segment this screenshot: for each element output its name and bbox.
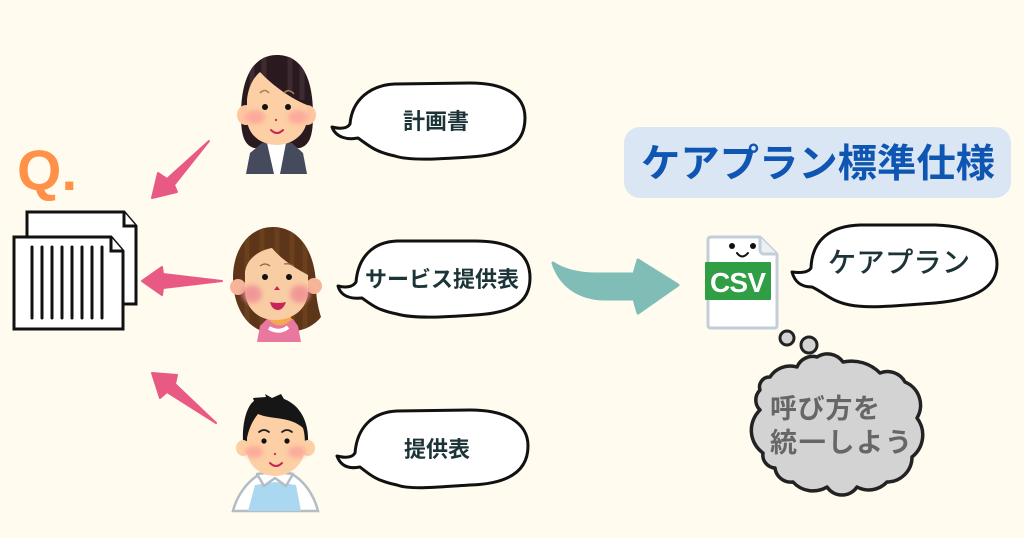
arrow: bottom person to documents (152, 373, 216, 423)
arrow: middle person to documents (142, 267, 222, 295)
speech bubble: ケアプラン: ケアプラン (828, 247, 970, 278)
thought cloud: 呼び方を統一しよう: 統一しよう (770, 428, 912, 458)
icon: stacked documents (14, 212, 136, 329)
speech bubble: 提供表 (337, 410, 528, 488)
title badge (624, 127, 1011, 198)
speech bubble: ケアプラン (792, 225, 997, 307)
thought cloud: 呼び方を統一しよう: 呼び方を (770, 394, 880, 424)
thought cloud: 呼び方を統一しよう (751, 331, 923, 495)
arrow: top person to documents (152, 141, 209, 198)
arrow: teal transition arrow (553, 260, 678, 313)
speech bubble: 計画書 (332, 83, 525, 159)
icon: CSV file (705, 237, 777, 328)
person: woman with brown hair (230, 225, 322, 342)
person: woman in suit (237, 50, 316, 174)
title badge: ケアプラン標準仕様 (641, 143, 995, 186)
speech bubble: 計画書: 計画書 (403, 109, 469, 134)
speech bubble: サービス提供表: サービス提供表 (365, 267, 519, 292)
icon: CSV file: CSV (710, 267, 766, 298)
speech bubble: サービス提供表 (338, 241, 530, 317)
speech bubble: 提供表: 提供表 (404, 437, 470, 462)
question mark label: Q. (17, 139, 77, 203)
person: male care worker (233, 394, 318, 511)
